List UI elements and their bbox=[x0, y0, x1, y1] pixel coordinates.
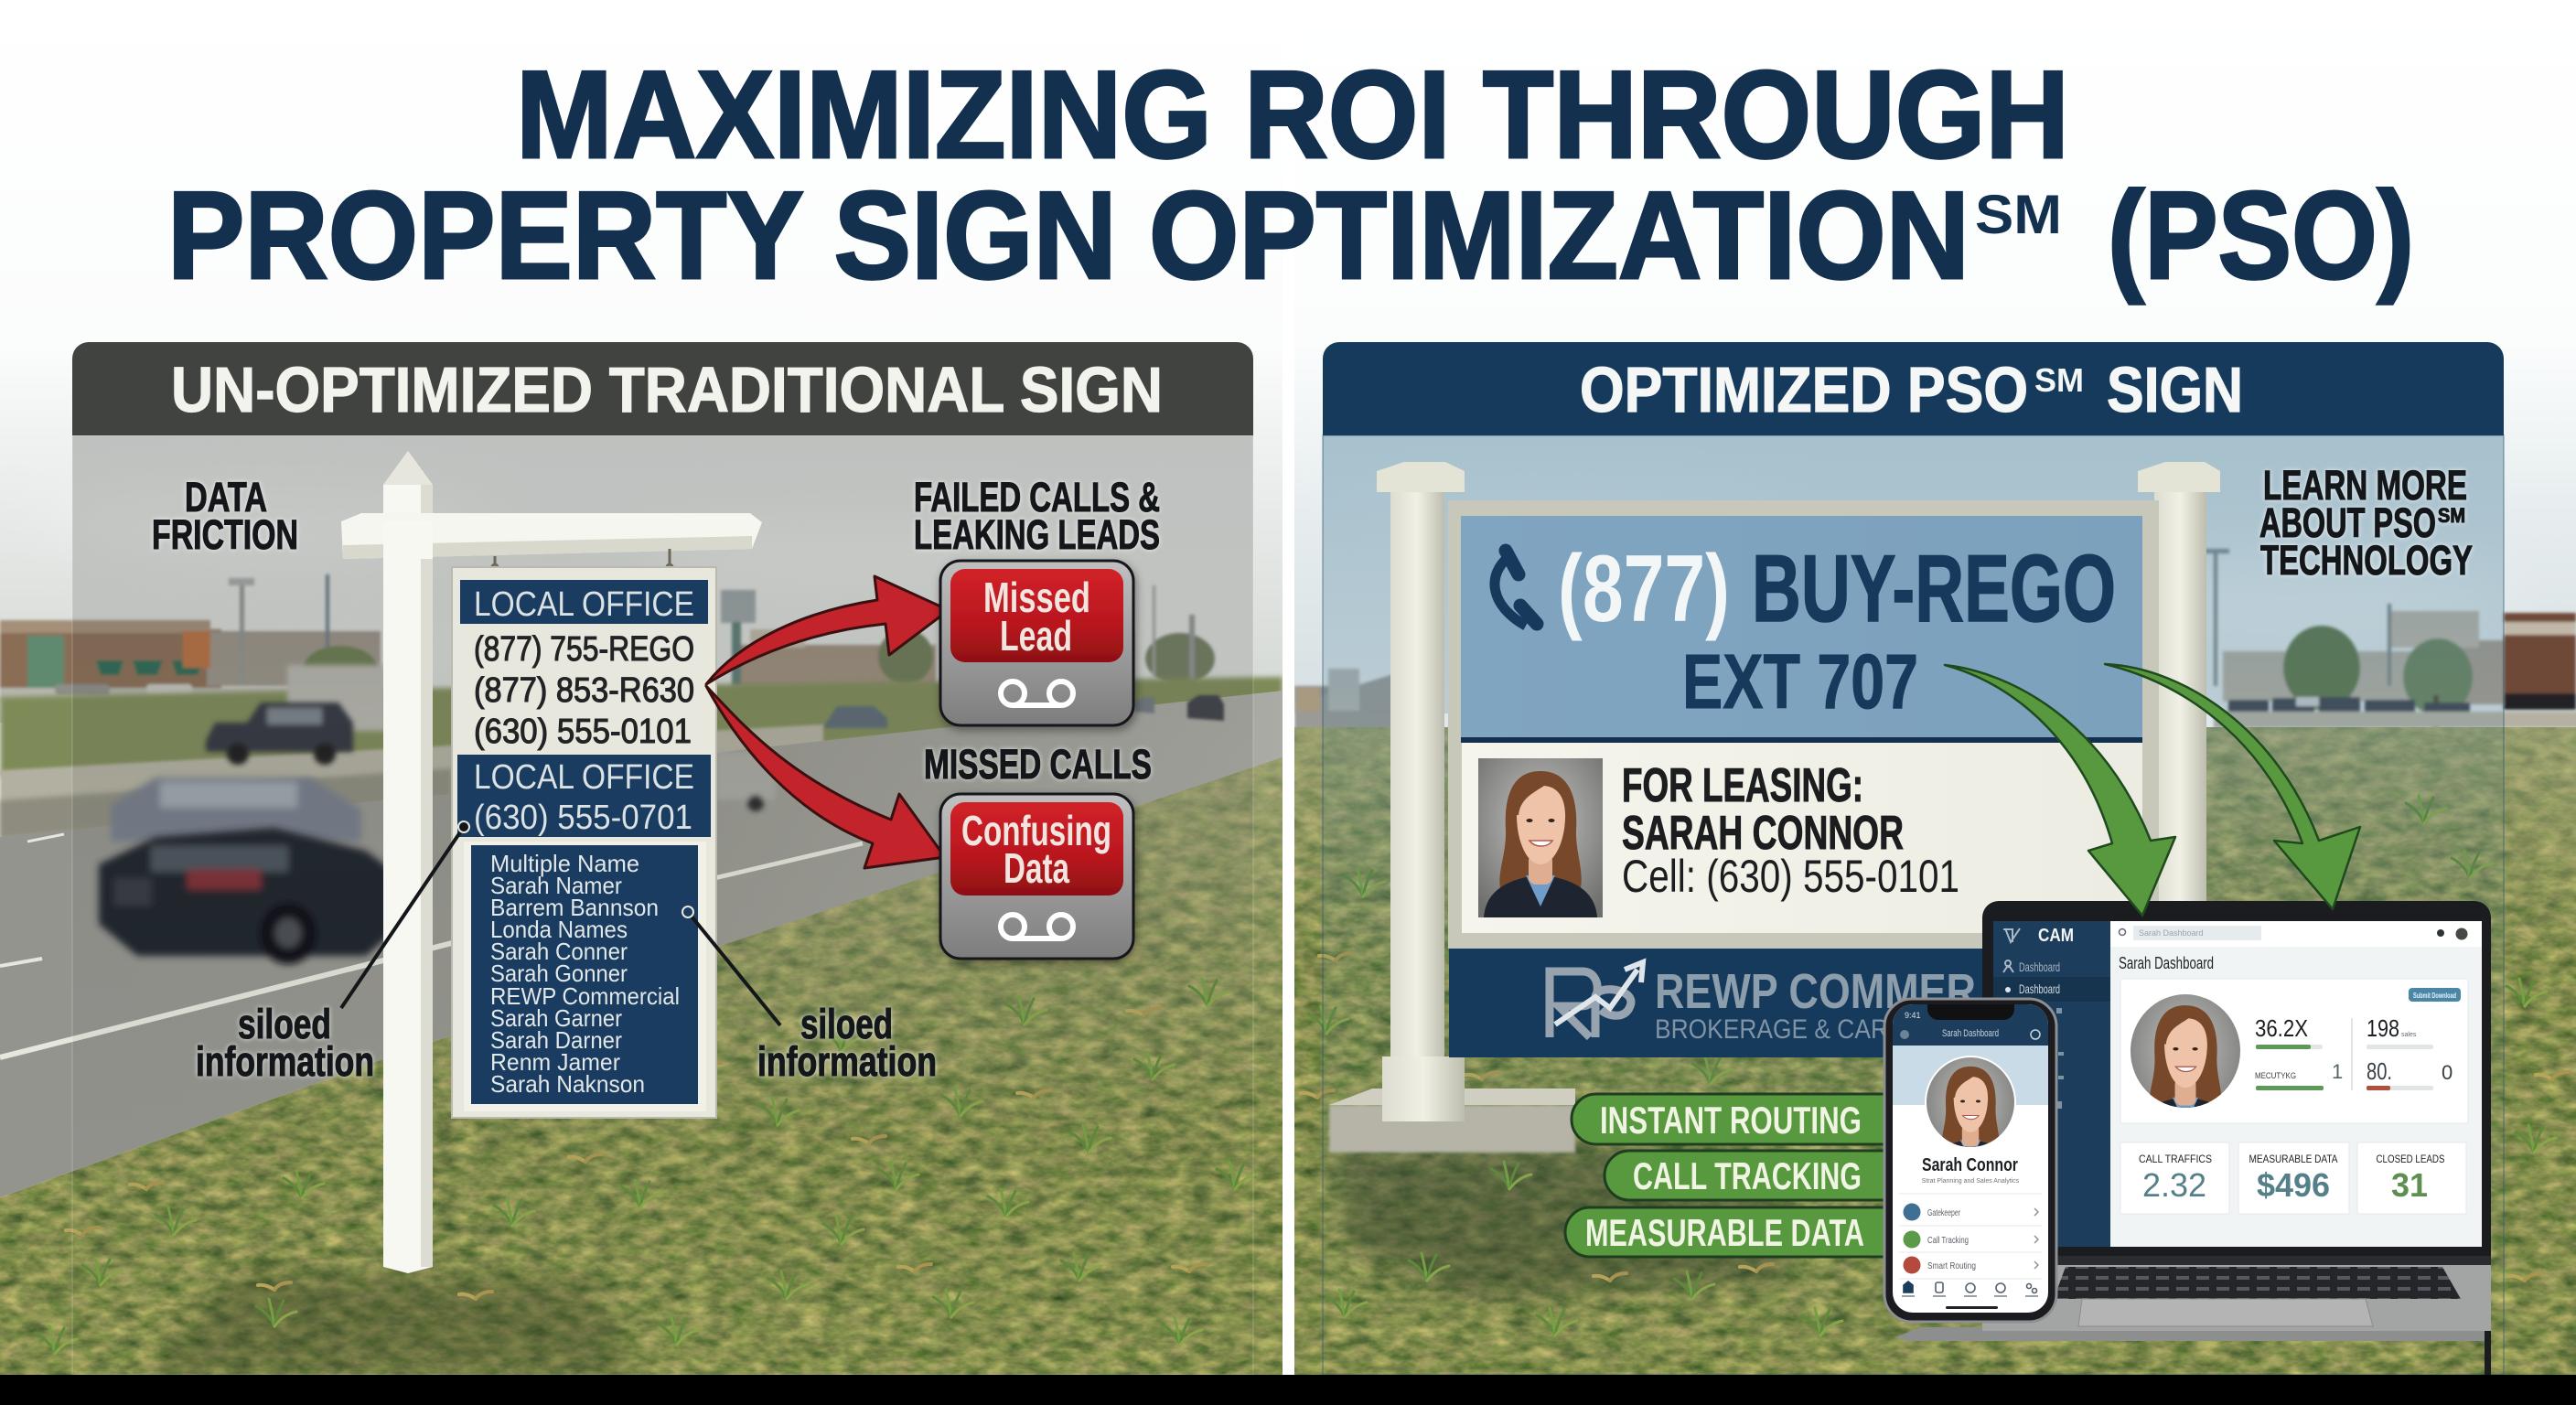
hanging sign board: (630) 555-0701 bbox=[474, 799, 692, 837]
keyboard bbox=[2054, 1267, 2461, 1299]
sidebar content: Dashboard bbox=[2019, 981, 2060, 996]
panel outline bbox=[72, 435, 1253, 1375]
logo mark bbox=[1550, 962, 1643, 1037]
panel: un-optimized traditional sign bbox=[72, 342, 1253, 1375]
callout: confusing data: Data bbox=[1004, 844, 1069, 892]
leasing contact: FOR LEASING: bbox=[1622, 759, 1863, 812]
grass band behind barrier bbox=[0, 677, 1283, 778]
callout: missed lead: Missed bbox=[983, 574, 1090, 621]
label: data friction bbox=[152, 474, 298, 558]
hanging sign board: Barrem Bannson bbox=[490, 894, 659, 921]
stat card: measurable data: $496 bbox=[2257, 1166, 2330, 1204]
phone avatar bbox=[1925, 1056, 2016, 1149]
laptop right edge stand bbox=[2485, 1247, 2491, 1375]
name list box bbox=[464, 842, 706, 1111]
phone: Gatekeeper bbox=[1927, 1208, 1960, 1218]
sign hooks bbox=[491, 549, 673, 577]
sign frame bbox=[1448, 500, 2159, 949]
panel header bar bbox=[1323, 342, 2504, 435]
label: missed calls: MISSED CALLS bbox=[924, 741, 1152, 788]
laptop base bbox=[1895, 1327, 2485, 1341]
leader line left bbox=[341, 821, 469, 1008]
arrow: red to confusing data bbox=[706, 686, 945, 868]
white truck bbox=[287, 665, 386, 731]
laptop bbox=[1895, 901, 2491, 1375]
label: siloed information left: information bbox=[196, 1038, 374, 1085]
label: siloed information right bbox=[757, 1001, 937, 1085]
stat card: closed leads: 31 bbox=[2391, 1166, 2428, 1204]
callout: missed lead bbox=[940, 561, 1133, 725]
hanging sign board: Sarah Naknson bbox=[490, 1070, 645, 1098]
phone app header bbox=[1893, 1004, 2048, 1046]
phone numbers: (877) 853-R630 bbox=[474, 671, 694, 710]
grass lower left bbox=[0, 750, 1283, 1381]
sign extension: EXT 707 bbox=[1682, 638, 1918, 724]
pill: call tracking: CALL TRACKING bbox=[1633, 1154, 1862, 1197]
phone notch bbox=[1927, 1004, 2014, 1020]
callout: confusing data bbox=[940, 794, 1133, 959]
phone nav bar bbox=[1904, 1282, 2036, 1293]
profile card: MECUTYKG bbox=[2255, 1071, 2296, 1080]
phone list rows bbox=[1899, 1194, 2042, 1279]
panel heading: SIGN bbox=[2107, 354, 2243, 425]
barrier bbox=[0, 724, 823, 839]
label: failed calls and leaking leads bbox=[914, 474, 1160, 558]
arrow: red to missed lead bbox=[706, 576, 949, 684]
label: siloed information right: siloed bbox=[800, 1001, 893, 1047]
hanging sign board: Renm Jamer bbox=[490, 1048, 620, 1076]
profile card: 0 bbox=[2442, 1061, 2453, 1084]
phone: Call Tracking bbox=[1927, 1236, 1969, 1246]
hanging sign board: Sarah Garner bbox=[490, 1004, 622, 1032]
stat card: call traffics: CALL TRAFFICS bbox=[2139, 1153, 2212, 1165]
label: data friction: FRICTION bbox=[152, 511, 298, 558]
profile card: 80. bbox=[2367, 1057, 2392, 1085]
label: learn more about PSO technology: TECHNOLOGY bbox=[2260, 537, 2473, 584]
callout: missed lead: Lead bbox=[1000, 612, 1072, 660]
sign phone number: (877) bbox=[1558, 536, 1730, 642]
laptop bezel bbox=[1982, 901, 2491, 1256]
phone numbers bbox=[474, 630, 694, 751]
label: failed calls and leaking leads: LEAKING LEADS bbox=[914, 511, 1160, 558]
leader line right bbox=[682, 906, 780, 1025]
sign phone number bbox=[1558, 536, 2116, 642]
pill: measurable data: MEASURABLE DATA bbox=[1585, 1211, 1864, 1254]
screen main bbox=[2110, 921, 2482, 1247]
label: siloed information right: information bbox=[757, 1038, 937, 1085]
pill: instant routing: INSTANT ROUTING bbox=[1600, 1099, 1862, 1142]
phone body bbox=[1884, 999, 2056, 1322]
phone: Sarah Dashboard bbox=[1942, 1028, 1999, 1039]
panel heading: UN-OPTIMIZED TRADITIONAL SIGN bbox=[171, 354, 1163, 425]
stat card: call traffics bbox=[2120, 1142, 2229, 1214]
panel header bar bbox=[72, 342, 1253, 435]
label: learn more about PSO technology bbox=[2259, 462, 2473, 584]
profile card: 36.2X bbox=[2255, 1014, 2308, 1042]
title: SM bbox=[1975, 184, 2062, 245]
brand strip bbox=[1449, 949, 2044, 1057]
profile card: 1 bbox=[2332, 1060, 2343, 1083]
grass tufts right bbox=[1301, 796, 2569, 1335]
title: MAXIMIZING ROI THROUGH bbox=[516, 45, 2069, 184]
hanging sign board: Multiple Name bbox=[490, 850, 639, 877]
hanging sign board: Sarah Darner bbox=[490, 1026, 622, 1054]
icon: phone bbox=[1495, 551, 1537, 626]
hanging sign board bbox=[452, 567, 716, 1118]
dark car blur bbox=[99, 828, 402, 964]
far buildings left bbox=[0, 574, 1215, 702]
leasing contact bbox=[1622, 759, 1959, 902]
sidebar content: Dashboard bbox=[2019, 960, 2060, 974]
phone bbox=[1884, 999, 2056, 1322]
search bar bbox=[2119, 926, 2468, 940]
header: local office bbox=[460, 580, 708, 624]
sign post bbox=[341, 451, 762, 1273]
left photo scene: highway bbox=[0, 381, 1283, 1375]
clouds bbox=[55, 467, 1107, 649]
profile card: 198 bbox=[2367, 1014, 2399, 1042]
stat card: closed leads: CLOSED LEADS bbox=[2377, 1153, 2444, 1165]
grass right bbox=[1294, 727, 2576, 1375]
profile card: Submit Download bbox=[2413, 992, 2456, 1000]
far buildings right bbox=[1294, 549, 2576, 759]
phone numbers: (877) 755-REGO bbox=[474, 630, 694, 669]
brand tagline: BROKERAGE & CAR bbox=[1655, 1014, 1888, 1045]
search bar: Sarah Dashboard bbox=[2139, 928, 2204, 938]
left post bbox=[1377, 462, 1465, 1121]
sign white panel bbox=[1462, 743, 2142, 933]
benefit pills bbox=[1565, 1094, 1919, 1257]
label: siloed information left bbox=[196, 1001, 374, 1085]
stat card: closed leads bbox=[2357, 1142, 2466, 1214]
dashboard title: Sarah Dashboard bbox=[2119, 954, 2214, 972]
hanging sign board: Londa Names bbox=[490, 916, 628, 943]
stat card: measurable data: MEASURABLE DATA bbox=[2249, 1153, 2338, 1165]
phone name: Sarah Connor bbox=[1922, 1155, 2018, 1175]
monument base bbox=[1329, 1089, 1575, 1153]
hanging sign board: Sarah Conner bbox=[490, 938, 628, 965]
profile card: sales bbox=[2401, 1032, 2417, 1038]
pickup bbox=[206, 702, 353, 765]
hanging sign board: LOCAL OFFICE bbox=[474, 585, 694, 624]
title: PROPERTY SIGN OPTIMIZATION bbox=[167, 166, 1970, 305]
sign top panel bbox=[1461, 516, 2142, 737]
silver car blur bbox=[111, 778, 361, 842]
hanging sign board: REWP Commercial bbox=[490, 982, 680, 1010]
lane lines bbox=[0, 834, 863, 1057]
leasing contact: Cell: (630) 555-0101 bbox=[1622, 851, 1959, 902]
phone banner bbox=[1893, 1046, 2048, 1105]
arrow: green to laptop screen bbox=[2105, 664, 2360, 909]
label: learn more about PSO technology: ABOUT PSO bbox=[2259, 499, 2436, 546]
title: (PSO) bbox=[2108, 166, 2414, 305]
road bbox=[0, 691, 1283, 1197]
arrow: green from extension to dashboard bbox=[1945, 665, 2175, 916]
phone: Strat Planning and Sales Analytics bbox=[1922, 1178, 2020, 1185]
callout: confusing data: Confusing bbox=[961, 807, 1111, 854]
phone: Smart Routing bbox=[1927, 1261, 1976, 1271]
second office block bbox=[457, 755, 711, 837]
screen sidebar bbox=[1993, 921, 2110, 1247]
stat card: call traffics: 2.32 bbox=[2142, 1166, 2206, 1204]
stat card: measurable data bbox=[2238, 1142, 2349, 1214]
leasing contact: SARAH CONNOR bbox=[1622, 807, 1904, 860]
trackpad bbox=[2078, 1299, 2373, 1326]
grass tufts bbox=[37, 979, 1257, 1354]
title bbox=[167, 45, 2414, 305]
icon: voicemail bbox=[1001, 915, 1073, 938]
right-side white truck bbox=[716, 752, 776, 811]
phone: 9:41 bbox=[1905, 1011, 1921, 1020]
label: learn more about PSO technology: SM bbox=[2438, 504, 2465, 527]
profile card bbox=[2120, 979, 2468, 1134]
sidebar content bbox=[1993, 926, 2110, 1109]
hanging sign board: Sarah Gonner bbox=[490, 960, 628, 987]
bottom black bar bbox=[0, 1375, 2576, 1405]
label: learn more about PSO technology: LEARN MORE bbox=[2263, 462, 2467, 509]
right photo scene: commercial lot bbox=[1294, 0, 2576, 1375]
hanging sign board: LOCAL OFFICE bbox=[474, 758, 694, 797]
label: failed calls and leaking leads: FAILED CALLS & bbox=[914, 474, 1160, 520]
sidebar content: CAM bbox=[2038, 926, 2074, 946]
panel outline bbox=[1323, 435, 2504, 1375]
label: data friction: DATA bbox=[185, 474, 267, 520]
distant cars right bbox=[825, 695, 1224, 728]
panel heading: SM bbox=[2034, 361, 2084, 399]
panel heading: OPTIMIZED PSO bbox=[1580, 354, 2028, 425]
panel: optimized PSO sign bbox=[1323, 342, 2504, 1375]
icon: voicemail bbox=[1001, 681, 1073, 705]
brand name: REWP COMMER bbox=[1655, 964, 1976, 1019]
phone numbers: (630) 555-0101 bbox=[474, 713, 692, 751]
agent photo bbox=[1478, 758, 1603, 917]
sign phone number: BUY-REGO bbox=[1752, 536, 2116, 642]
right post bbox=[2138, 462, 2220, 942]
hanging sign board: Sarah Namer bbox=[490, 872, 622, 899]
label: siloed information left: siloed bbox=[238, 1001, 331, 1047]
